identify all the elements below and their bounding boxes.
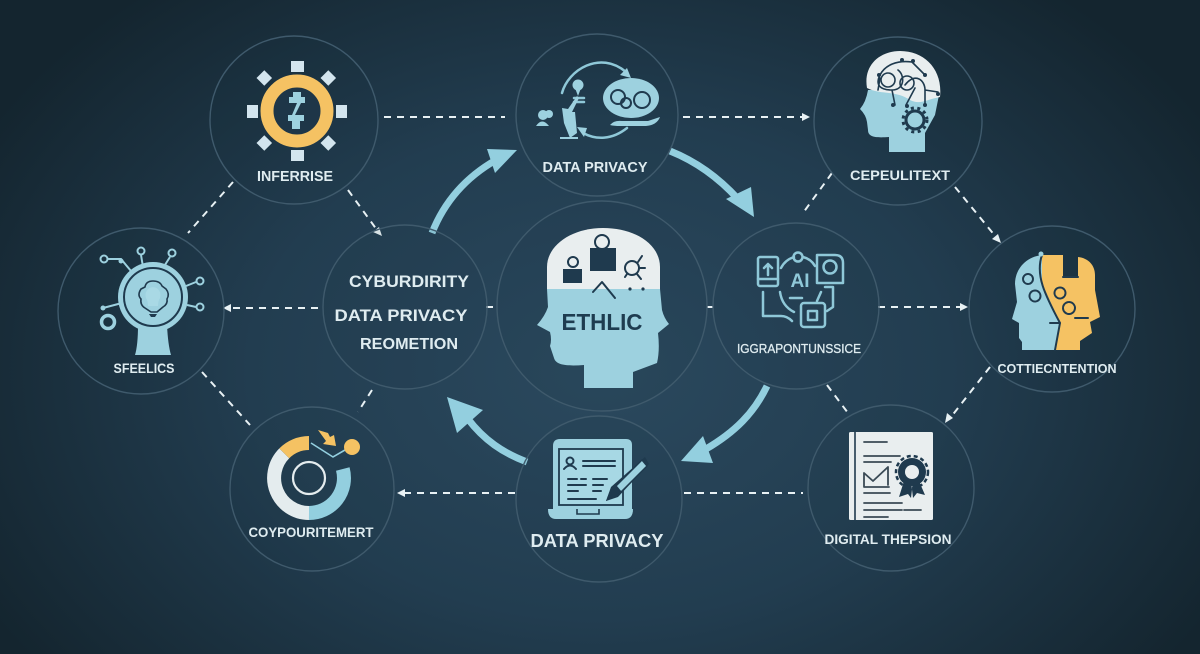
dashed connectors xyxy=(188,113,1001,497)
label: SFEELICS xyxy=(114,361,174,376)
label: DATA PRIVACY xyxy=(530,530,664,551)
icon: head with network xyxy=(860,51,940,152)
icon: gear with puzzle xyxy=(247,61,347,161)
icon: two-tone heads xyxy=(1012,252,1100,350)
arrow: cycle top-right xyxy=(670,151,754,217)
arrow: cycle bottom-left xyxy=(447,397,527,462)
icon: central head xyxy=(537,228,669,388)
text block: REOMETION xyxy=(360,336,458,353)
icon: certificate document xyxy=(849,432,933,520)
icon: head with lightbulb xyxy=(100,248,204,355)
label: CEPEULITEXT xyxy=(850,167,950,183)
icon: ai devices xyxy=(758,252,843,327)
panel: coypouritemert xyxy=(230,407,394,571)
panel: cottiecntention xyxy=(969,226,1135,392)
icon: data cycle xyxy=(536,62,660,139)
panel: cepeulitext xyxy=(814,37,982,205)
panel: inferrise xyxy=(210,36,378,204)
text block: DATA PRIVACY xyxy=(334,306,468,325)
panel: ai xyxy=(713,223,879,389)
text block: CYBURDIRITY xyxy=(349,272,470,291)
icon: ring gauge xyxy=(274,430,360,513)
panel: data privacy top xyxy=(516,34,678,196)
label: DATA PRIVACY xyxy=(542,160,648,176)
icon: laptop and pen xyxy=(548,439,649,519)
label: IGGRAPONTUNSSICE xyxy=(737,342,861,356)
label: COYPOURITEMERT xyxy=(248,525,374,540)
icon: ai devices: AI xyxy=(790,271,810,292)
text block xyxy=(334,272,470,353)
heading: ETHLIC xyxy=(562,309,643,335)
label: INFERRISE xyxy=(257,168,333,185)
panel: sfeelics xyxy=(58,228,224,394)
panel: central ethic xyxy=(497,201,707,411)
panel: data privacy bottom xyxy=(516,416,682,582)
label: DIGITAL THEPSION xyxy=(824,531,952,547)
panel: cyberdirity xyxy=(323,225,487,389)
panel: digital thepsion xyxy=(808,405,974,571)
arrow: cycle top-left xyxy=(432,149,517,233)
arrow: cycle bottom-right xyxy=(681,386,767,463)
label: COTTIECNTENTION xyxy=(998,361,1116,376)
